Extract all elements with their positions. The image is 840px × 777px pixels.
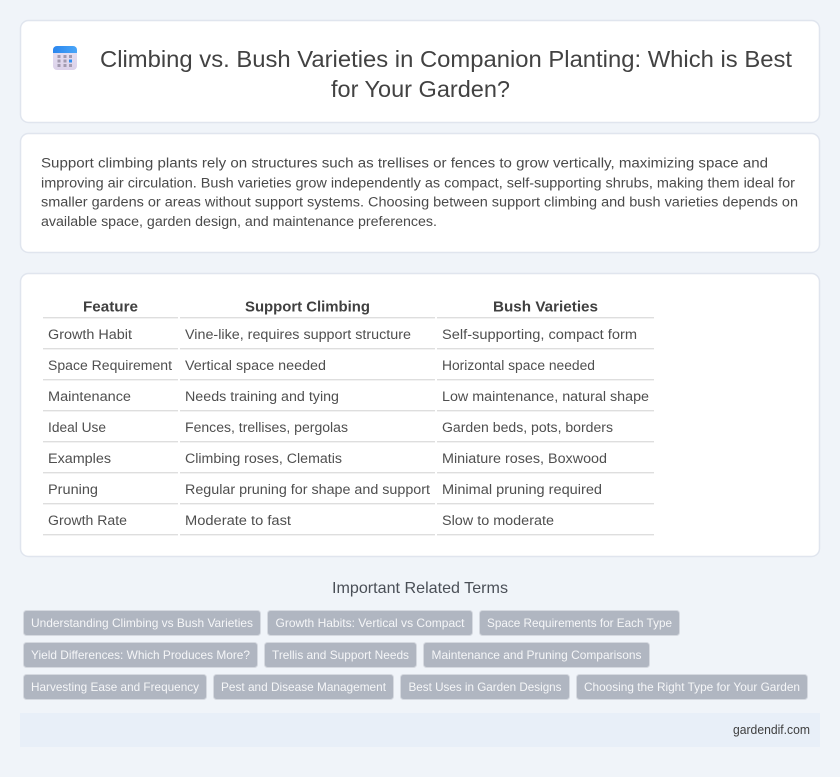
tag: [424, 642, 650, 668]
table header: [83, 298, 598, 316]
table header: Support Climbing: [245, 298, 370, 316]
tag: Best Uses in Garden Designs: [408, 680, 562, 694]
tag: Trellis and Support Needs: [272, 648, 409, 662]
panel: header: [20, 20, 820, 122]
tag: Understanding Climbing vs Bush Varieties: [31, 616, 253, 630]
title: for Your Garden?: [331, 76, 510, 102]
tag: Maintenance and Pruning Comparisons: [432, 648, 642, 662]
tag: [214, 674, 394, 700]
tag: [24, 610, 260, 636]
tag: [24, 674, 206, 700]
row: growth habit: Vine-like, requires support structure: [185, 326, 411, 342]
row: pruning: [48, 481, 602, 497]
table header: Feature: [83, 298, 138, 316]
tag: [400, 674, 570, 700]
panel: comparison table: [20, 274, 820, 556]
row: examples: Climbing roses, Clematis: [185, 450, 342, 466]
related term tags: [24, 610, 808, 700]
intro text: improving air circulation. Bush varieties grow independently as compact, self-supporting shrubs, making them ideal for: [41, 176, 795, 192]
row: growth rate: Moderate to fast: [185, 512, 291, 528]
row: maintenance: Low maintenance, natural shape: [442, 388, 649, 404]
intro text: Support climbing plants rely on structures such as trellises or fences to grow vertically, maximizing space and: [41, 156, 768, 172]
heading: important related terms: Important Related Terms: [332, 580, 508, 597]
row: ideal use: Ideal Use: [48, 419, 106, 435]
row: space requirement: Space Requirement: [48, 357, 172, 373]
icon: calendar: [53, 46, 77, 70]
row: maintenance: [48, 388, 649, 404]
panel: introduction: [20, 134, 820, 252]
tag: [576, 674, 808, 700]
table rules: [43, 318, 654, 535]
row: space requirement: Horizontal space needed: [442, 357, 595, 373]
table header: Bush Varieties: [493, 298, 598, 316]
tag: Yield Differences: Which Produces More?: [31, 648, 250, 662]
row: examples: [48, 450, 607, 466]
row: growth rate: Slow to moderate: [442, 512, 554, 528]
row: growth habit: Self-supporting, compact form: [442, 326, 637, 342]
row: maintenance: Needs training and tying: [185, 388, 339, 404]
intro text: smaller gardens or areas without support systems. Choosing between support climbing and bush varieties depends on: [41, 194, 798, 210]
tag: [268, 610, 472, 636]
row: maintenance: Maintenance: [48, 388, 131, 404]
tag: [480, 610, 680, 636]
row: examples: Miniature roses, Boxwood: [442, 450, 607, 466]
title: Climbing vs. Bush Varieties in Companion Planting: Which is Best: [100, 46, 793, 72]
tag: [24, 642, 258, 668]
tag: [264, 642, 416, 668]
tag: Space Requirements for Each Type: [487, 616, 672, 630]
row: space requirement: Vertical space needed: [185, 357, 326, 373]
footer source: gardendif.com: [733, 723, 810, 737]
row: ideal use: Fences, trellises, pergolas: [185, 419, 348, 435]
row: pruning: Minimal pruning required: [442, 481, 602, 497]
title: [100, 46, 793, 102]
row: examples: Examples: [48, 450, 111, 466]
row: growth habit: Growth Habit: [48, 326, 132, 342]
tag: Choosing the Right Type for Your Garden: [584, 680, 800, 694]
row: pruning: Regular pruning for shape and support: [185, 481, 430, 497]
row: pruning: Pruning: [48, 481, 98, 497]
row: growth habit: [48, 326, 637, 342]
row: ideal use: Garden beds, pots, borders: [442, 419, 613, 435]
tag: Pest and Disease Management: [221, 680, 387, 694]
row: growth rate: [48, 512, 554, 528]
tag: Growth Habits: Vertical vs Compact: [276, 616, 465, 630]
intro text: [41, 156, 798, 230]
row: ideal use: [48, 419, 613, 435]
row: growth rate: Growth Rate: [48, 512, 127, 528]
row: space requirement: [48, 357, 595, 373]
footer: [20, 713, 820, 747]
intro text: available space, garden design, and maintenance preferences.: [41, 214, 437, 230]
tag: Harvesting Ease and Frequency: [31, 680, 199, 694]
